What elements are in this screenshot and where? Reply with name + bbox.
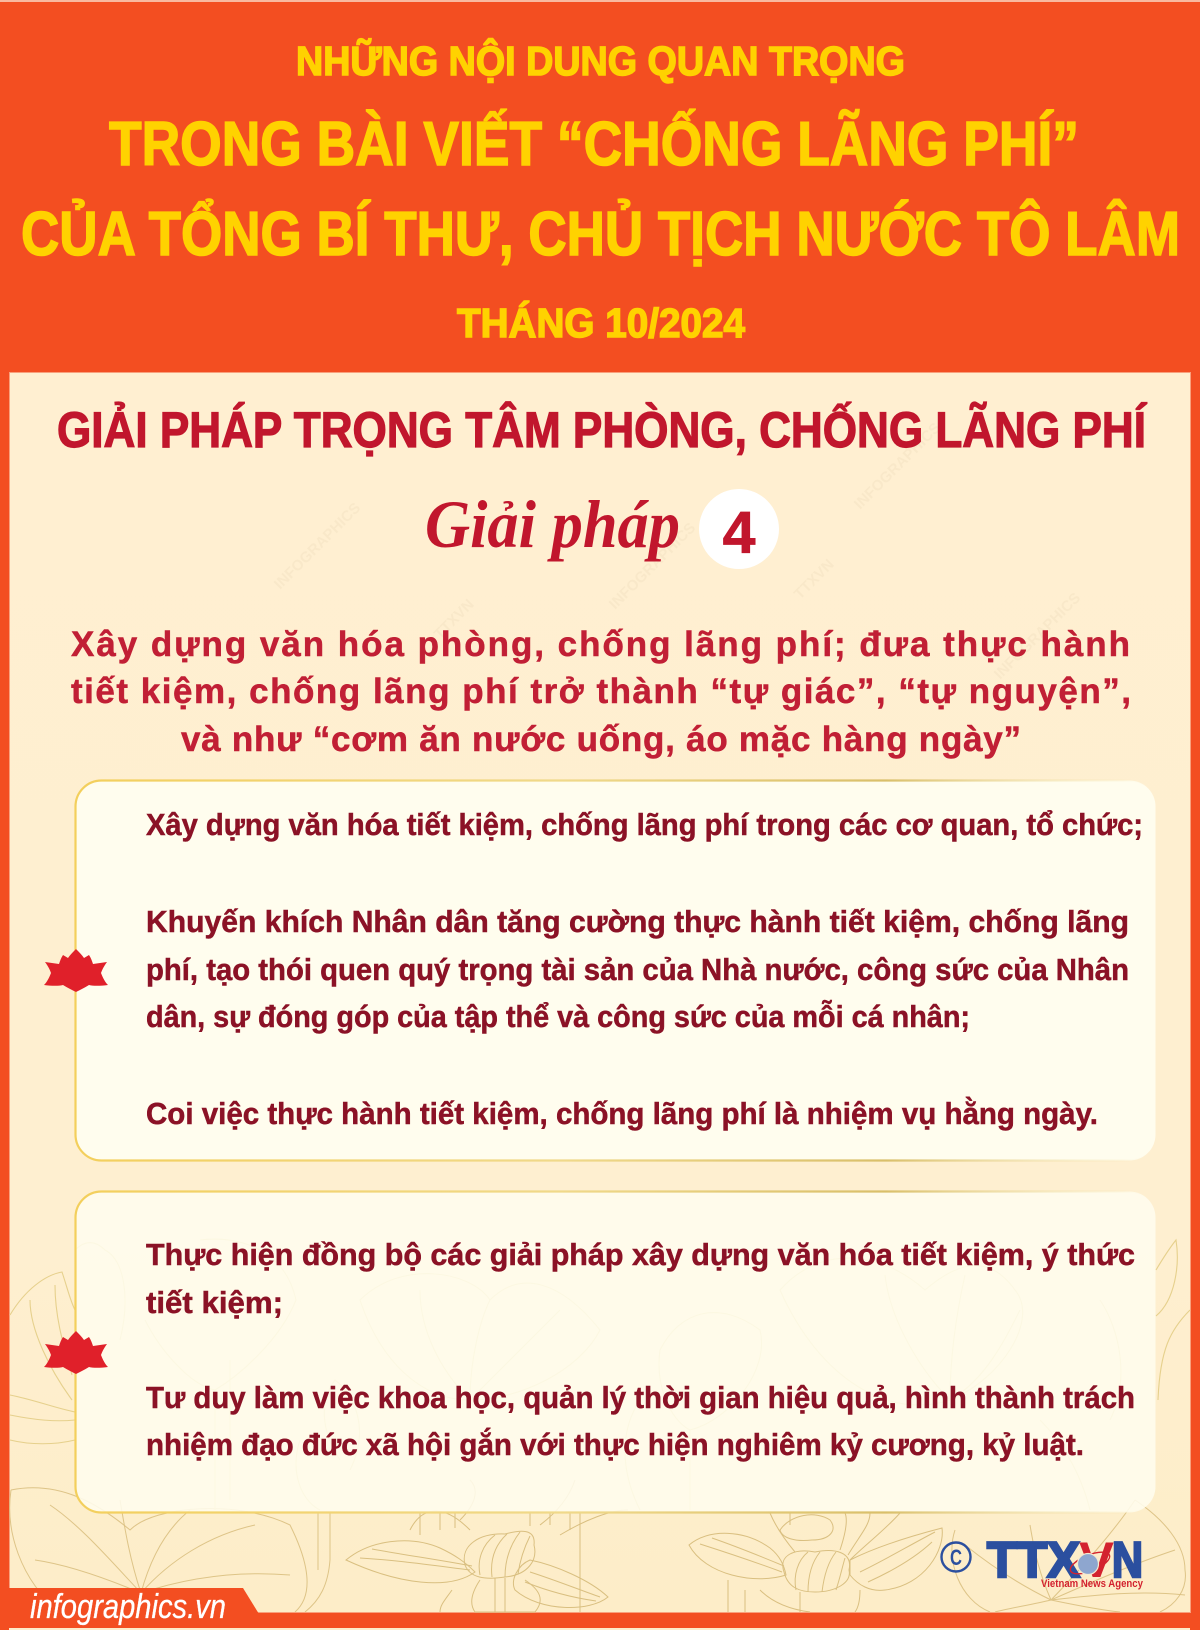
card 2 text 2 — [146, 1380, 1135, 1462]
icon: red lotus — [44, 1331, 108, 1374]
watermark text: INFOGRAPHICS — [991, 589, 1084, 683]
copyright mark: C — [950, 1545, 962, 1570]
number badge — [699, 489, 779, 569]
card 1 text 2: phí, tạo thói quen quý trọng tài sản của Nhà nước, công sức của Nhân — [146, 952, 1129, 987]
summary line 3: và như “cơm ăn nước uống, áo mặc hàng ngày” — [181, 720, 1021, 759]
watermark text: INFOGRAPHICS — [851, 419, 944, 513]
card 2 text 2: nhiệm đạo đức xã hội gắn với thực hiện nghiêm kỷ cương, kỷ luật. — [146, 1426, 1084, 1462]
summary line 2: tiết kiệm, chống lãng phí trở thành “tự giác”, “tự nguyện”, — [71, 672, 1131, 711]
card 1 text 2: dân, sự đóng góp của tập thể và công sức của mỗi cá nhân; — [146, 999, 970, 1034]
watermark text — [271, 419, 1084, 683]
copyright and agency logo — [942, 1532, 1144, 1590]
panel: card 2 — [44, 1192, 1156, 1512]
footer tab — [0, 1588, 259, 1626]
agency wordmark: TTX — [987, 1532, 1080, 1588]
panel: card 1 — [44, 780, 1156, 1160]
watermark text: INFOGRAPHICS — [606, 519, 699, 613]
card 2 box — [76, 1192, 1156, 1512]
panel: cream content area — [10, 372, 1190, 1612]
card 1 text 2 — [146, 904, 1129, 1034]
card 1 box — [76, 780, 1156, 1160]
background lotus line art — [10, 1239, 1190, 1612]
label text: Giải pháp — [425, 486, 680, 562]
card 1 text 1: Xây dựng văn hóa tiết kiệm, chống lãng phí trong các cơ quan, tổ chức; — [146, 807, 1143, 842]
card 2 text 1: tiết kiệm; — [146, 1285, 283, 1320]
watermark text: INFOGRAPHICS — [271, 499, 364, 593]
icon: red lotus — [44, 949, 108, 992]
card 2 text 1: Thực hiện đồng bộ các giải pháp xây dựng văn hóa tiết kiệm, ý thức — [146, 1237, 1135, 1272]
solution summary — [71, 625, 1131, 759]
agency tagline: Vietnam News Agency — [1041, 1578, 1144, 1590]
agency wordmark — [987, 1532, 1143, 1588]
number: 4 — [723, 500, 756, 566]
card 1 text 3: Coi việc thực hành tiết kiệm, chống lãng phí là nhiệm vụ hằng ngày. — [146, 1095, 1098, 1131]
agency wordmark: N — [1112, 1532, 1143, 1588]
card 2 text 2: Tư duy làm việc khoa học, quản lý thời gian hiệu quả, hình thành trách — [146, 1380, 1135, 1415]
card 2 text 1 — [146, 1237, 1135, 1320]
watermark text: TTXVN — [431, 596, 478, 643]
site name: infographics.vn — [30, 1588, 226, 1626]
agency wordmark: V — [1079, 1532, 1115, 1588]
watermark text: TTXVN — [791, 556, 838, 603]
card 1 text 2: Khuyến khích Nhân dân tăng cường thực hành tiết kiệm, chống lãng — [146, 904, 1129, 939]
title line 1: NHỮNG NỘI DUNG QUAN TRỌNG — [296, 38, 905, 84]
solution label — [425, 486, 779, 569]
date: THÁNG 10/2024 — [457, 300, 745, 346]
tab shape — [0, 1588, 259, 1614]
copyright mark — [942, 1542, 970, 1572]
summary line 1: Xây dựng văn hóa phòng, chống lãng phí; đưa thực hành — [71, 625, 1130, 664]
header — [21, 38, 1180, 346]
